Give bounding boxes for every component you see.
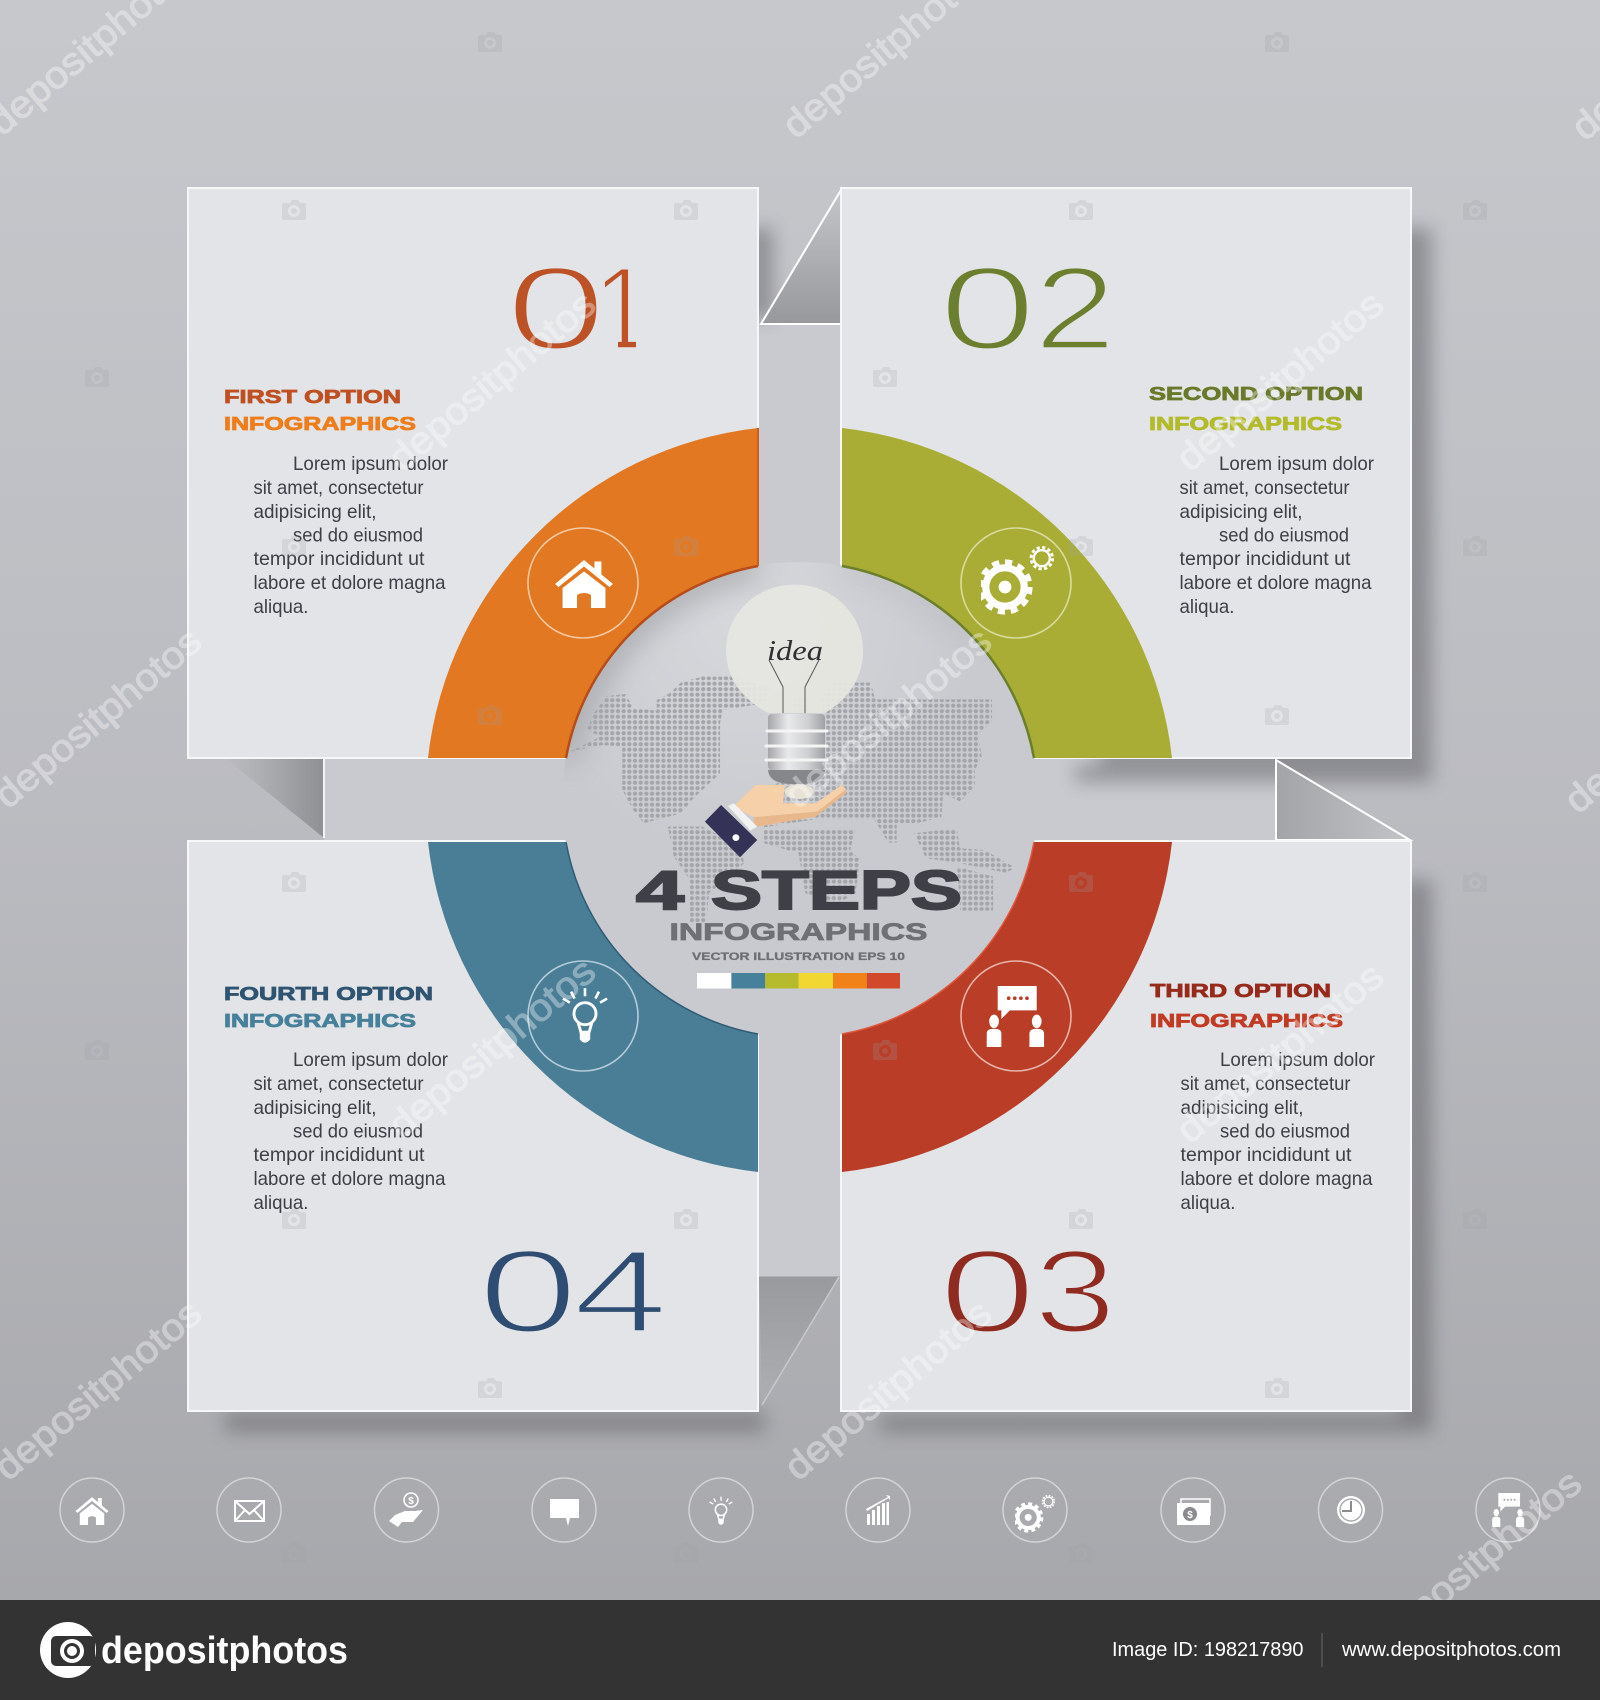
panel shadows — [225, 228, 1432, 1432]
footer bar — [0, 1600, 1600, 1700]
heading: second option — [1149, 383, 1363, 434]
number 04: 4 — [573, 1226, 668, 1358]
body text: panel 3: adipisicing elit, — [1180, 1097, 1304, 1119]
small icon: gears — [1015, 1496, 1054, 1531]
arc: olive — [842, 428, 1172, 758]
footer url: www.depositphotos.com — [1341, 1639, 1561, 1661]
number 04 — [478, 1226, 668, 1358]
number 04: 0 — [478, 1226, 578, 1358]
number 03 — [939, 1226, 1116, 1358]
body text: panel 2: tempor incididunt ut — [1180, 548, 1351, 570]
number 02: 0 — [939, 243, 1036, 375]
heading: first option: INFOGRAPHICS — [224, 413, 416, 434]
body text: panel 2: sed do eiusmod — [1219, 524, 1349, 546]
body text: panel 3: sed do eiusmod — [1220, 1120, 1350, 1142]
watermarks: depositphotos — [1169, 283, 1392, 480]
number 02: 2 — [1034, 243, 1116, 375]
title: 4 steps: STEPS — [711, 859, 962, 921]
small icon: hand with coin — [389, 1493, 423, 1527]
body text: panel 4: sit amet, consectetur — [254, 1073, 424, 1095]
panel: 01 — [188, 188, 758, 758]
number 01 — [516, 268, 636, 348]
fold: left — [225, 758, 324, 838]
body text: panel 3: Lorem ipsum dolor — [1220, 1049, 1375, 1071]
body text: panel 4: tempor incididunt ut — [254, 1144, 425, 1166]
number 03: 0 — [939, 1226, 1036, 1358]
heading: third option: INFOGRAPHICS — [1150, 1010, 1343, 1031]
small icon: chat bubble — [550, 1499, 579, 1526]
title: 4 steps: 4 — [636, 859, 685, 921]
world map — [570, 677, 1016, 923]
body text: panel 1: tempor incididunt ut — [254, 548, 425, 570]
arc: orange — [428, 428, 758, 758]
watermarks: depositphotos — [381, 283, 604, 480]
small icon: money — [1177, 1499, 1210, 1525]
title: 4 steps — [636, 859, 962, 921]
body text: panel 1: Lorem ipsum dolor — [293, 453, 448, 475]
heading: third option: THIRD OPTION — [1150, 980, 1331, 1001]
heading: second option: SECOND OPTION — [1149, 383, 1363, 404]
subtitle: infographics: INFOGRAPHICS — [670, 919, 928, 946]
body text: panel 1: adipisicing elit, — [254, 501, 376, 523]
heading: first option — [224, 386, 416, 434]
body text: panel 1 — [254, 453, 448, 618]
centre circle — [562, 562, 1038, 1038]
watermarks: depositphotos — [1169, 955, 1392, 1152]
fold: right — [1276, 760, 1410, 840]
watermarks: depositphotos — [1367, 1462, 1590, 1659]
small icon: home — [76, 1497, 108, 1525]
heading: fourth option: INFOGRAPHICS — [224, 1010, 416, 1031]
body text: panel 3: tempor incididunt ut — [1180, 1144, 1352, 1166]
illustration: light bulb: idea — [767, 635, 823, 667]
body text: panel 1: sit amet, consectetur — [254, 477, 424, 499]
body text: panel 3: sit amet, consectetur — [1180, 1073, 1351, 1095]
small icon: money: $ — [1187, 1510, 1193, 1521]
number 03: 3 — [1034, 1226, 1116, 1358]
heading: fourth option: FOURTH OPTION — [224, 983, 433, 1004]
icon: bulb on blue — [528, 961, 638, 1071]
icon: people on red — [961, 961, 1071, 1071]
panel: 04 — [188, 841, 758, 1411]
small icon: clock — [1337, 1496, 1365, 1524]
icon: gears on olive — [961, 528, 1071, 638]
small icon: people — [1492, 1493, 1524, 1527]
body text: panel 2: labore et dolore magna — [1180, 572, 1372, 594]
fold: bottom — [759, 1277, 839, 1405]
heading: third option — [1150, 980, 1343, 1031]
illustration: light bulb — [726, 585, 863, 784]
body text: panel 3 — [1180, 1049, 1375, 1214]
heading: fourth option — [224, 983, 433, 1031]
arc: blue — [428, 842, 758, 1172]
body text: panel 4: adipisicing elit, — [254, 1097, 376, 1119]
body text: panel 2: aliqua. — [1180, 596, 1234, 618]
body text: panel 2 — [1180, 453, 1374, 618]
panel: 02 — [841, 188, 1411, 758]
footer image id: Image ID: 198217890 — [1112, 1639, 1304, 1661]
caption: vector illustration: VECTOR ILLUSTRATION EPS 10 — [692, 951, 905, 963]
body text: panel 3: aliqua. — [1180, 1192, 1236, 1214]
illustration: hand — [705, 784, 846, 857]
body text: panel 3: labore et dolore magna — [1180, 1168, 1373, 1190]
colour bar — [697, 973, 900, 988]
body text: panel 4: labore et dolore magna — [254, 1168, 446, 1190]
body text: panel 1: labore et dolore magna — [254, 572, 446, 594]
body text: panel 2: Lorem ipsum dolor — [1219, 453, 1374, 475]
heading: second option: INFOGRAPHICS — [1149, 413, 1342, 434]
footer logo: depositphotos — [101, 1630, 348, 1672]
small icon: hand with coin: $ — [408, 1496, 414, 1507]
fold: top — [761, 190, 841, 324]
icon row — [60, 1478, 1540, 1542]
body text: panel 4: aliqua. — [254, 1192, 308, 1214]
body text: panel 2: sit amet, consectetur — [1180, 477, 1350, 499]
body text: panel 1: sed do eiusmod — [293, 524, 423, 546]
icon: home on orange — [528, 528, 638, 638]
small icon: growth chart — [866, 1495, 890, 1525]
body text: panel 4 — [254, 1049, 448, 1214]
watermarks: depositphotos — [777, 620, 1000, 817]
heading: first option: FIRST OPTION — [224, 386, 401, 407]
watermarks: depositphotos — [381, 950, 604, 1147]
cross strip behind panels — [324, 324, 1276, 1276]
number 02 — [939, 243, 1116, 375]
watermarks: depositphotos — [777, 1292, 1000, 1489]
panel: 03 — [841, 841, 1411, 1411]
footer logo — [40, 1622, 348, 1678]
small icon: mail — [235, 1501, 264, 1521]
body text: panel 4: Lorem ipsum dolor — [293, 1049, 448, 1071]
number 01: 1 — [593, 243, 653, 375]
body text: panel 1: aliqua. — [254, 596, 308, 618]
number 01: 0 — [506, 243, 606, 375]
body text: panel 4: sed do eiusmod — [293, 1120, 423, 1142]
arc: red — [842, 842, 1172, 1172]
body text: panel 2: adipisicing elit, — [1180, 501, 1302, 523]
watermark cameras — [85, 32, 1487, 1563]
small icon: bulb — [710, 1497, 732, 1525]
